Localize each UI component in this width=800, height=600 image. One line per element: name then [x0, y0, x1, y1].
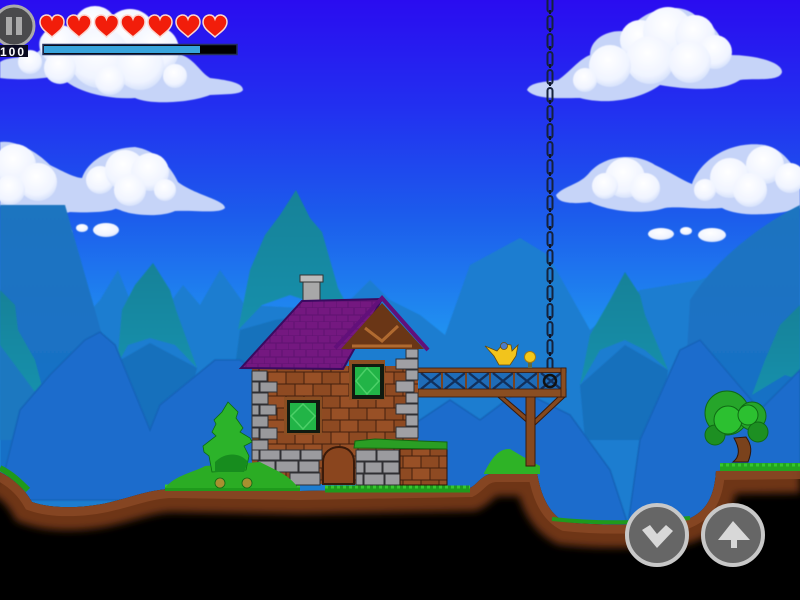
brick step [400, 449, 447, 485]
clouds: small left [46, 223, 119, 238]
grass mound: centre [484, 449, 540, 474]
window upper [349, 360, 385, 400]
HUD [0, 6, 237, 59]
door [323, 447, 354, 484]
teal pine mountain: far right [752, 305, 800, 395]
cloud: middle left [0, 142, 225, 215]
teal pine mountain: right [580, 272, 668, 440]
brick wall [252, 366, 418, 484]
stone corner right [396, 349, 418, 438]
teal pine mountain: centre left [225, 190, 352, 440]
cloud: top left [0, 6, 243, 102]
chain [545, 0, 555, 372]
grass strips [0, 465, 800, 522]
pine tree [165, 402, 298, 488]
button: up [703, 505, 763, 565]
house [241, 275, 447, 485]
round tree [705, 391, 768, 462]
cloud: top right [527, 7, 782, 101]
cloud: middle right [556, 144, 800, 214]
gable [335, 298, 428, 350]
coin [524, 352, 536, 368]
teal pine mountain: far left [0, 290, 43, 440]
grass ledge [354, 439, 447, 449]
score counter: 100 [0, 45, 26, 59]
ground [0, 460, 800, 600]
energy bar [43, 44, 237, 54]
stone corner left [252, 371, 277, 450]
chimney [300, 275, 323, 304]
window lower [284, 397, 322, 435]
teal pine mountain: left [117, 263, 197, 440]
foreground mountains [0, 332, 800, 525]
bridge support [498, 396, 565, 466]
roof [241, 299, 382, 369]
far mountains [0, 205, 800, 540]
bird character [485, 342, 518, 365]
bridge [418, 368, 566, 466]
bridge railing [419, 372, 564, 390]
stone foundation [252, 450, 400, 485]
clouds: small right [648, 227, 726, 242]
hearts [40, 15, 227, 37]
button: down [627, 505, 687, 565]
pause button [0, 6, 34, 46]
